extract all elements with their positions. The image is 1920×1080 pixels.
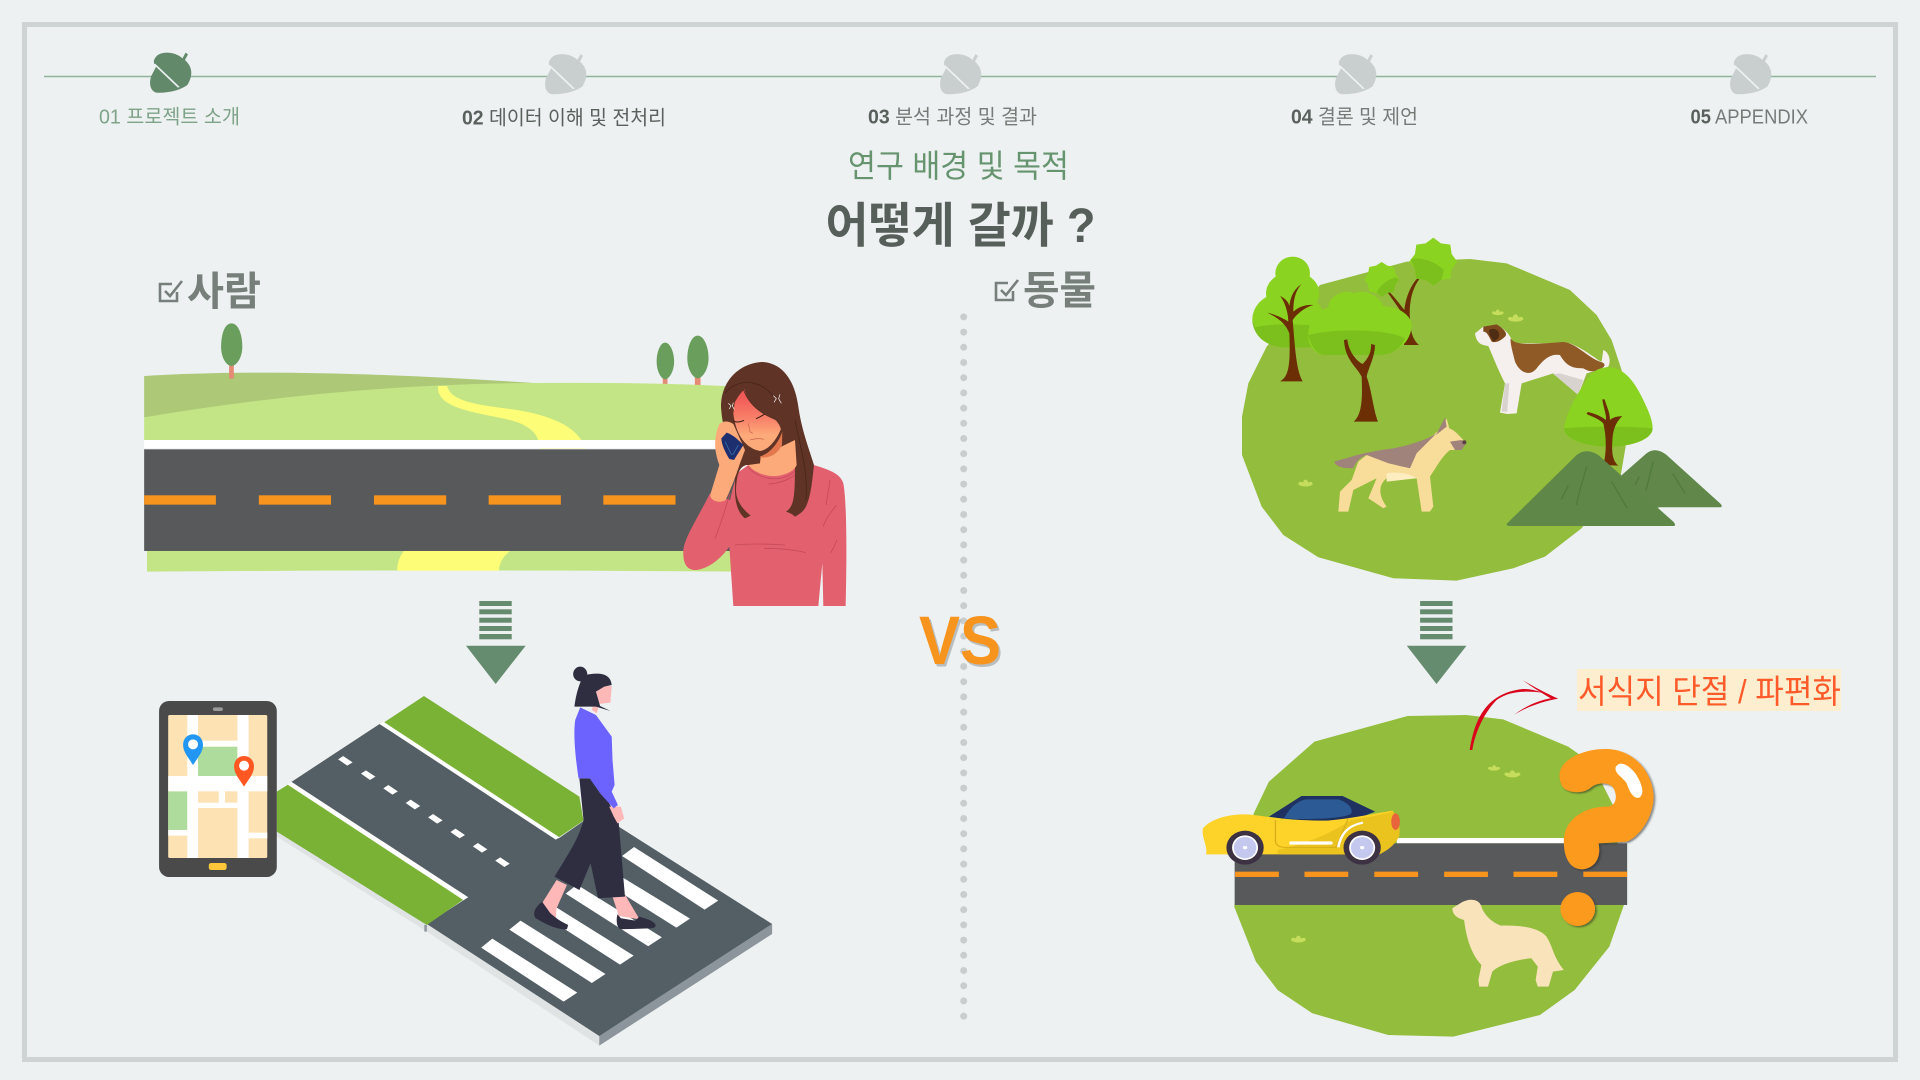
- heading: animal: 동물: [1023, 269, 1096, 313]
- arm and hand: [710, 421, 745, 502]
- neck shadow: [760, 432, 782, 458]
- sweater: [683, 464, 846, 606]
- red curved arrow: [1470, 680, 1558, 750]
- icon: acorn 04: [1335, 54, 1376, 94]
- map screen: [168, 715, 267, 858]
- icon: orange pin: [234, 756, 254, 787]
- tree center: [1308, 292, 1412, 422]
- eyes: [733, 414, 765, 422]
- road block shadow: [277, 832, 599, 1046]
- asphalt: [291, 724, 772, 1036]
- nav label 02: 02 데이터 이해 및 전처리: [462, 106, 666, 130]
- road edge lines: [288, 722, 559, 900]
- center dashes: [338, 756, 510, 867]
- mountains: [1507, 450, 1722, 526]
- icon: acorn 05: [1730, 54, 1771, 94]
- asphalt road: [144, 449, 739, 551]
- road dashes: [1235, 872, 1627, 877]
- question mark highlight: [1616, 764, 1642, 798]
- navigation timeline: [44, 53, 1876, 129]
- icon: acorn 03: [940, 54, 981, 94]
- lower grass: [147, 551, 739, 572]
- dog: st bernard: [1475, 324, 1610, 414]
- tree left: [1252, 257, 1324, 381]
- icon: acorn 01 active: [150, 53, 191, 93]
- icon: acorn 02: [545, 54, 586, 94]
- lane dashes: [144, 495, 676, 505]
- yellow car: [1203, 796, 1400, 865]
- grass tufts: [1298, 309, 1523, 487]
- nose and mouth: [748, 423, 764, 440]
- back hill: [144, 373, 533, 417]
- question mark: [1559, 749, 1654, 926]
- road edge: [1397, 838, 1568, 843]
- walking woman: [534, 667, 656, 929]
- hair strands: [725, 382, 806, 500]
- white road edge: [144, 440, 734, 448]
- heading: person: 사람: [187, 270, 261, 314]
- tree right: [1564, 367, 1653, 466]
- woman on phone: [683, 362, 846, 606]
- back trees: [1364, 238, 1457, 345]
- lower grass strip: [277, 784, 465, 925]
- front hill: [144, 383, 736, 441]
- golden retriever: [1452, 900, 1564, 987]
- dog: german shepherd: [1334, 417, 1467, 512]
- nav label 01: 01 프로젝트 소개: [99, 106, 240, 128]
- nav label 05: 05 APPENDIX: [1690, 106, 1808, 128]
- dotted divider: [960, 317, 967, 1020]
- crosswalk and walking woman illustration: [277, 667, 772, 1046]
- upper grass strip: [384, 696, 584, 837]
- face: [733, 388, 782, 451]
- VS label: VS: [921, 604, 1003, 682]
- tablet map icon: [159, 701, 277, 877]
- tree 1: [221, 323, 242, 379]
- icon: blue pin: [183, 734, 203, 765]
- phone: [721, 433, 743, 460]
- neck: [748, 440, 797, 476]
- grass tufts: [1291, 765, 1520, 942]
- road block side: [599, 924, 772, 1046]
- grass blob: [1234, 715, 1625, 1037]
- hair back: [721, 362, 814, 518]
- grass blob: [1242, 259, 1626, 581]
- sweater folds: [715, 467, 837, 553]
- road scenery illustration: [144, 323, 739, 572]
- crosswalk stripes: [481, 847, 718, 1002]
- road: [1235, 843, 1627, 905]
- lower path: [397, 551, 510, 571]
- subtitle: 연구 배경 및 목적: [848, 148, 1069, 184]
- arrow: right down: [1407, 601, 1466, 684]
- fragmented habitat illustration: [1203, 680, 1654, 1037]
- tree 2: [657, 343, 674, 385]
- arrow: left down: [466, 601, 526, 684]
- title: 어떻게 갈까 ?: [826, 200, 1096, 253]
- VS label: VS: [919, 602, 1001, 679]
- nav label 04: 04 결론 및 제언: [1291, 106, 1418, 128]
- front hair: [721, 383, 783, 433]
- nav label 03: 03 분석 과정 및 결과: [868, 106, 1037, 128]
- callout: habitat fragmentation: 서식지 단절 / 파편화: [1578, 673, 1841, 710]
- forest habitat illustration: [1242, 238, 1722, 581]
- anger marks: [728, 394, 781, 409]
- tree 3: [687, 336, 709, 386]
- winding path: [438, 386, 585, 449]
